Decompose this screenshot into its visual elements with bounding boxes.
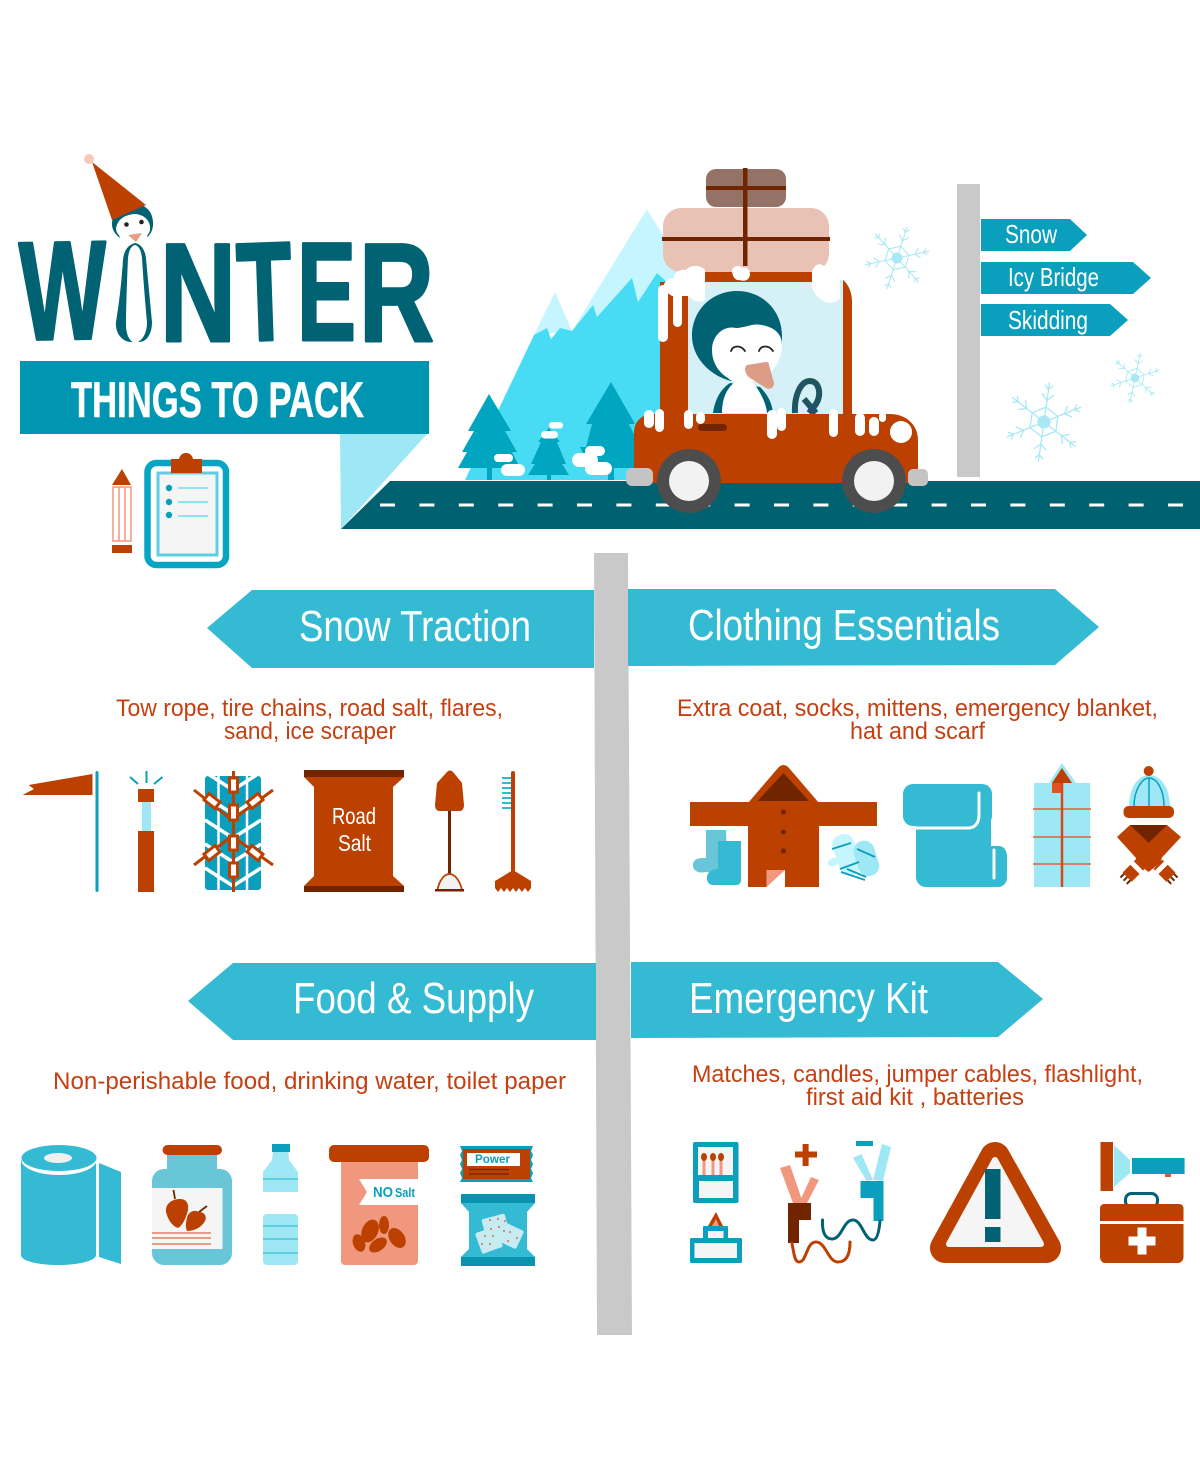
icon: power bar: [460, 1146, 533, 1182]
heading: Snow Traction: [207, 590, 594, 668]
icon: socks: [693, 830, 741, 885]
sign: Skidding: [981, 304, 1128, 336]
car cab: [660, 272, 852, 417]
icon: warning triangle: [945, 1157, 1046, 1248]
panel: Clothing Essentials: [628, 589, 1181, 887]
wheels: [657, 449, 906, 513]
icon: shovel: [435, 770, 464, 892]
text: Emergency list: first aid kit , batteries: [806, 1084, 1024, 1111]
icon: no salt snack bag: NO: [373, 1184, 393, 1201]
text: Emergency list: Matches, candles, jumper cables, flashlight,: [692, 1061, 1143, 1088]
signpost: [957, 184, 1151, 477]
snow on car: [644, 264, 886, 439]
icon: first aid kit: [1100, 1194, 1184, 1263]
icon: no salt snack bag: Salt: [395, 1185, 416, 1200]
icon: crackers pack: [461, 1194, 535, 1266]
title: WINTER: R: [359, 214, 434, 371]
icon: jumper cables: [780, 1141, 891, 1262]
icon: emergency blanket: [903, 784, 1007, 887]
banner: Things to Pack: [20, 361, 429, 434]
car body: [626, 414, 928, 486]
snowflake 2: [1106, 347, 1164, 409]
icon: tire chains: [194, 768, 273, 898]
snowflake 1: [858, 217, 936, 299]
heading: Clothing Essentials: Clothing Essentials: [688, 601, 1000, 650]
text: Snow Traction list: sand, ice scraper: [224, 718, 396, 745]
title: WINTER: N: [160, 214, 236, 371]
icon: coat: [690, 765, 877, 887]
penguin letter I with hat: I: [127, 227, 143, 361]
icon: candle: [690, 1212, 742, 1263]
icon: flashlight: [1100, 1142, 1185, 1191]
sign: Snow: Snow: [1005, 219, 1057, 249]
text: Clothing list: hat and scarf: [850, 718, 985, 745]
icon: matchbox: [693, 1142, 738, 1203]
title: WINTER: W: [18, 211, 108, 370]
heading: Clothing Essentials: [628, 589, 1099, 666]
heading: Food & Supply: [188, 963, 596, 1040]
heading: Emergency Kit: [631, 962, 1043, 1038]
luggage: [662, 168, 830, 272]
icon: jar of peppers: [152, 1145, 232, 1265]
panel: Snow Traction: [22, 590, 594, 898]
snowflake 3: [1001, 377, 1087, 467]
road: [341, 481, 1200, 529]
sign: Icy Bridge: [981, 262, 1151, 294]
banner: Things to Pack: THINGS TO PACK: [71, 372, 364, 428]
title: WINTER: T: [234, 212, 295, 371]
icon: sleeping bag: [1033, 763, 1091, 887]
text: Clothing list: [677, 695, 1158, 745]
heading: Food & Supply: Food & Supply: [293, 974, 534, 1023]
icon: no salt snack bag: [329, 1145, 429, 1265]
text: Food list: Non-perishable food, drinking water, toilet paper: [53, 1068, 566, 1095]
icon: power bar: Power: [475, 1152, 510, 1166]
sign: Skidding: Skidding: [1008, 305, 1088, 335]
icon: clipboard: [148, 453, 226, 565]
icon: mittens: [820, 831, 882, 881]
text: Snow Traction list: Tow rope, tire chains, road salt, flares,: [116, 695, 503, 722]
title block: Winter: [18, 154, 434, 371]
icon: toilet paper roll: [21, 1145, 121, 1265]
sign: Icy Bridge: Icy Bridge: [1008, 262, 1099, 292]
trees: [458, 382, 660, 480]
penguin driver: [692, 291, 819, 413]
heading: Emergency Kit: Emergency Kit: [689, 974, 928, 1023]
banner fold: [340, 434, 427, 529]
panel: Food & Supply: [21, 963, 596, 1266]
icon: road salt bag: Salt: [338, 830, 372, 856]
text: Clothing list: Extra coat, socks, mittens, emergency blanket,: [677, 695, 1158, 722]
title: WINTER: [18, 211, 434, 371]
icon: hat and scarf: [1117, 766, 1181, 885]
heading: Snow Traction: Snow Traction: [299, 602, 531, 651]
text: Snow Traction list: [116, 695, 503, 745]
icon: road salt bag: [304, 770, 404, 892]
mountains: [465, 209, 690, 480]
icon: pencil: [112, 469, 132, 553]
car with luggage and penguin driver: [626, 168, 928, 513]
icon: tow rope flag: [22, 771, 98, 892]
text: Emergency list: [692, 1061, 1143, 1111]
icon: road salt bag: Road: [332, 803, 376, 829]
centre pole: [594, 553, 632, 1335]
icon: ice scraper: [495, 771, 531, 892]
panel: Emergency Kit: [631, 962, 1185, 1263]
sign: Snow: [981, 219, 1087, 251]
snow drifts: [494, 422, 612, 476]
icon: flare: [130, 771, 162, 892]
icon: water bottle: [263, 1144, 298, 1265]
penguin letter I with hat: [84, 154, 153, 361]
title: WINTER: E: [297, 213, 356, 370]
